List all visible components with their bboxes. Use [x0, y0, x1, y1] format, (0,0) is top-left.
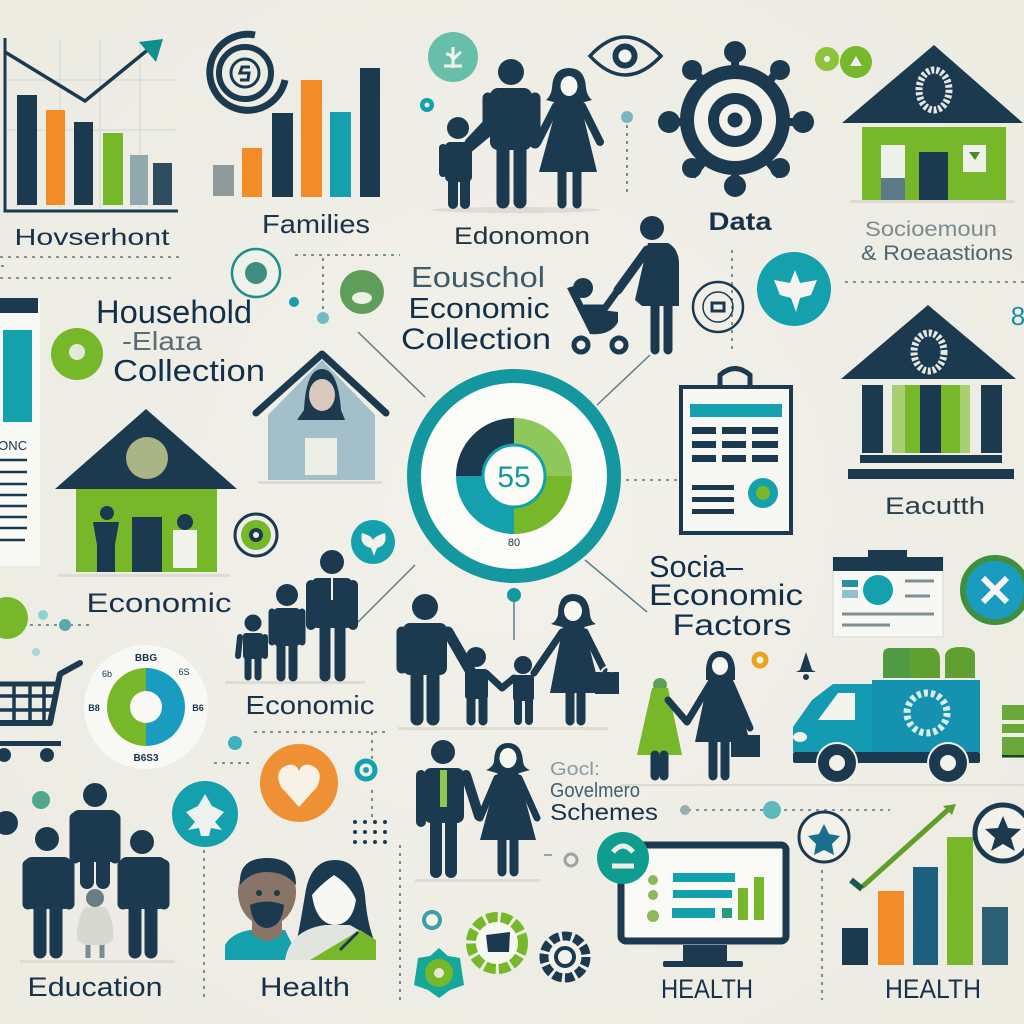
card icon: [833, 550, 943, 637]
small report right edge: [1002, 705, 1024, 758]
heading: Household Elaɪa Collection: -Elaɪa: [122, 326, 203, 356]
text: Government Schemes: Govelmero: [550, 780, 640, 802]
heading: Household Elaɪa Collection: Household: [96, 294, 252, 330]
icon: teal pin: [621, 111, 633, 123]
heading: Families: Families: [262, 209, 370, 239]
icon: small teal ring top: [420, 98, 434, 112]
donut center: [414, 376, 614, 576]
bar chart: top left: [5, 38, 178, 211]
small teal blobs: [32, 610, 437, 925]
icon: gear target: [658, 41, 814, 197]
teal node on dashes: [680, 801, 781, 819]
bank building: [841, 305, 1016, 479]
family of three: [225, 550, 365, 684]
donut chart left: 6b: [102, 669, 112, 679]
heading: Economic middle: Economic: [246, 690, 374, 720]
heading: Eacutth: Eacutth: [885, 493, 985, 520]
icon: teal star badge: [757, 252, 831, 326]
heading: Household Economic Collection center: Economic: [408, 293, 550, 325]
heading: HEALTH chart: HEALTH: [885, 974, 981, 1004]
small left-edge icons: [0, 597, 50, 835]
icon: teal leaf: [172, 781, 238, 847]
family holding hands: [398, 594, 619, 730]
icon: orange heart: [260, 744, 338, 822]
text: Government Schemes: [550, 759, 658, 825]
heading: Household Elaɪa Collection: [96, 294, 265, 388]
heading: Data: Data: [708, 208, 773, 236]
bar chart: bottom right: [842, 804, 1008, 965]
icon: pin and bell: [754, 652, 816, 680]
connector lines: [355, 332, 650, 640]
heading: Health portraits: Health: [260, 972, 350, 1002]
icon: sprout badge: [428, 32, 478, 82]
group of three people: [20, 783, 175, 963]
donut chart left: 6S: [178, 667, 190, 677]
heading: Socio-Economic Factors: Economic: [649, 579, 803, 612]
gear icons: [414, 912, 586, 998]
icon: small ring teal: [357, 761, 375, 779]
text: Government Schemes: Gocl:: [550, 759, 600, 779]
heading: Socio-Economic Factors: Factors: [672, 609, 792, 642]
small teal dots left: [289, 297, 329, 324]
portraits: [225, 858, 376, 960]
delivery truck: [793, 647, 980, 784]
teal ball connector: [507, 588, 521, 602]
heading: Household Economic Collection center: Eouschol: [411, 262, 545, 294]
icon: dashed dots right of couple: [544, 854, 577, 866]
heading: Socio-Economic Factors: [649, 549, 803, 642]
text: Government Schemes: Schemes: [550, 799, 658, 825]
heading: Socio-Economic Factors: Socia–: [649, 549, 744, 584]
text: Roeaastions: & Roeaastions: [861, 242, 1013, 265]
text: Socioemoun: Socioemoun: [865, 218, 997, 241]
couple: [415, 740, 540, 882]
heading: Economic left: Economic: [86, 588, 232, 618]
donut chart left: B6: [192, 703, 204, 713]
icon: star rings: [799, 805, 1024, 862]
donut chart left: [84, 645, 208, 769]
house top right: [842, 45, 1023, 203]
icon: target ring: [693, 282, 743, 332]
bar chart: top middle: [213, 68, 380, 197]
heading: Household Economic Collection center: [401, 262, 551, 356]
icon: blue circle badge: [963, 558, 1024, 622]
panel: left report: [0, 298, 40, 566]
icon: green ring: [232, 249, 280, 297]
icon: dot grid: [353, 820, 387, 844]
donut center: 55: [497, 461, 531, 494]
heading: Hovserhont: Hovserhont: [14, 224, 170, 250]
donut chart left: BBG: [135, 653, 157, 664]
icon: teal butterfly badge: [351, 520, 395, 564]
family group top: [430, 59, 600, 213]
heading: Edonomon: Edonomon: [454, 223, 590, 250]
parent with stroller: [567, 216, 679, 352]
icon: green pair of circles: [815, 46, 872, 78]
icon: green orb: [340, 270, 384, 314]
heading: Household Elaɪa Collection: Collection: [113, 353, 265, 388]
icon: green badge left: [51, 328, 103, 380]
heading: Education: Education: [28, 972, 162, 1002]
icon: teal monitor badge: [597, 832, 649, 884]
house with portrait: [256, 354, 386, 484]
donut chart left: B8: [88, 703, 100, 713]
house with green walls: [55, 409, 237, 577]
monitor chart: [621, 845, 786, 967]
couple with bag: [637, 651, 760, 776]
icon: shopping cart: [0, 663, 80, 762]
donut center: 80: [508, 537, 520, 549]
clipboard form: [681, 368, 791, 533]
heading: Household Economic Collection center: Collection: [401, 323, 551, 356]
icon: spiral: [210, 34, 285, 110]
icon: ring badge: [235, 514, 277, 556]
icon: eye: [590, 37, 661, 75]
heading: HEALTH monitor: HEALTH: [661, 974, 753, 1004]
donut chart left: B6S3: [133, 753, 159, 764]
